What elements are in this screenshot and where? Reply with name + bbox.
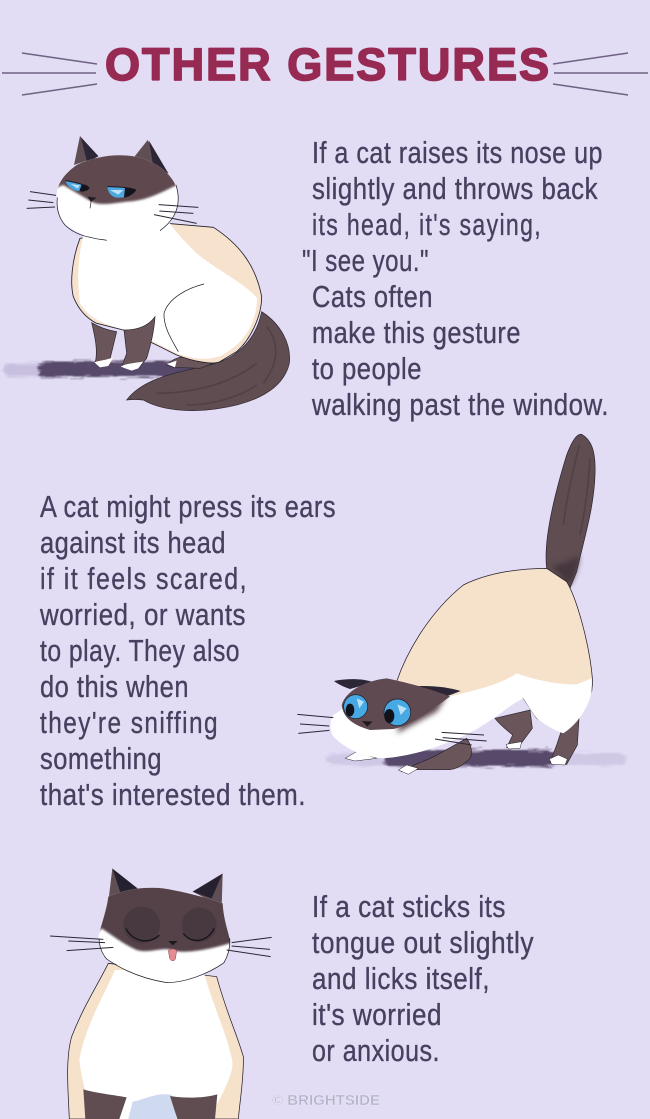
text block: tongue out (312, 889, 534, 1068)
text block: pressed ears: if it feels scared, (40, 561, 248, 596)
inner rear leg (495, 710, 532, 748)
body (397, 568, 593, 733)
whiskers (27, 192, 198, 223)
text block: raised nose: its head, it's saying, (312, 207, 542, 242)
text block: pressed ears: do this when (40, 669, 189, 704)
white paws (94, 357, 177, 371)
text block: pressed ears: against its head (40, 525, 226, 560)
text block: pressed ears: something (40, 741, 162, 776)
rear paw (167, 357, 213, 368)
outer rear leg (550, 713, 579, 764)
head (57, 155, 179, 240)
left front leg (83, 1089, 127, 1119)
eyes (344, 695, 411, 726)
text block: pressed ears: they're sniffing (40, 705, 219, 740)
watermark: © BRIGHTSIDE (272, 1092, 380, 1109)
white chest and belly (78, 223, 257, 359)
head contour lines (99, 938, 230, 983)
face mask (100, 888, 230, 954)
right front leg (170, 1094, 217, 1119)
illustration: cat looking up, raised nose (3, 136, 290, 411)
white chest (79, 970, 233, 1119)
ears (334, 679, 461, 698)
far front paw (345, 752, 377, 761)
whiskers (50, 936, 272, 957)
eyes (65, 181, 136, 198)
head contour lines (57, 185, 178, 240)
rear white paws (506, 742, 567, 765)
text block: tongue out: If a cat sticks its (312, 889, 506, 924)
text block: tongue out: it's worried (312, 997, 442, 1032)
pale blue belly (128, 1094, 177, 1119)
body (72, 223, 262, 363)
tail (546, 434, 595, 588)
whiskers (297, 714, 487, 745)
front white paw (398, 765, 418, 774)
tongue (168, 949, 177, 961)
illustration: crouching cat with flattened ears (297, 434, 627, 774)
text block: raised nose: "I see you." (302, 243, 429, 278)
ears (74, 136, 168, 173)
text block: pressed ears (39, 489, 336, 812)
tail (127, 312, 290, 411)
title whiskers right (553, 53, 648, 95)
title: OTHER GESTURES (105, 39, 549, 90)
front leg left (92, 323, 117, 366)
text block: pressed ears: worried, or wants (39, 597, 246, 632)
text block: raised nose: to people (312, 351, 422, 386)
text block: tongue out: tongue out slightly (312, 925, 534, 960)
illustration: cat with closed eyes and tongue out (50, 868, 272, 1119)
ground shadow (3, 362, 208, 377)
nose (362, 721, 373, 727)
head (98, 888, 230, 983)
ground shadow (327, 750, 627, 767)
front leg right (122, 317, 155, 368)
title whiskers left (2, 53, 97, 95)
text block: tongue out: or anxious. (312, 1033, 440, 1068)
body (68, 963, 243, 1119)
head mask (342, 678, 450, 733)
text block: raised nose: make this gesture (312, 315, 521, 350)
text block: tongue out: and licks itself, (312, 961, 490, 996)
face mask (58, 155, 176, 206)
haunch line (164, 284, 204, 352)
text block: pressed ears: that's interested them. (40, 777, 306, 812)
front leg (402, 738, 471, 772)
closed eyes (123, 907, 217, 943)
nose (168, 941, 178, 945)
nose and mouth (87, 197, 97, 202)
white band (330, 673, 592, 758)
text block: raised nose: Cats often (312, 279, 433, 314)
text block: raised nose (302, 135, 609, 422)
text block: raised nose: slightly and throws back (312, 171, 598, 206)
text block: pressed ears: A cat might press its ears (40, 489, 336, 524)
ears (108, 868, 223, 907)
text block: pressed ears: to play. They also (40, 633, 240, 668)
